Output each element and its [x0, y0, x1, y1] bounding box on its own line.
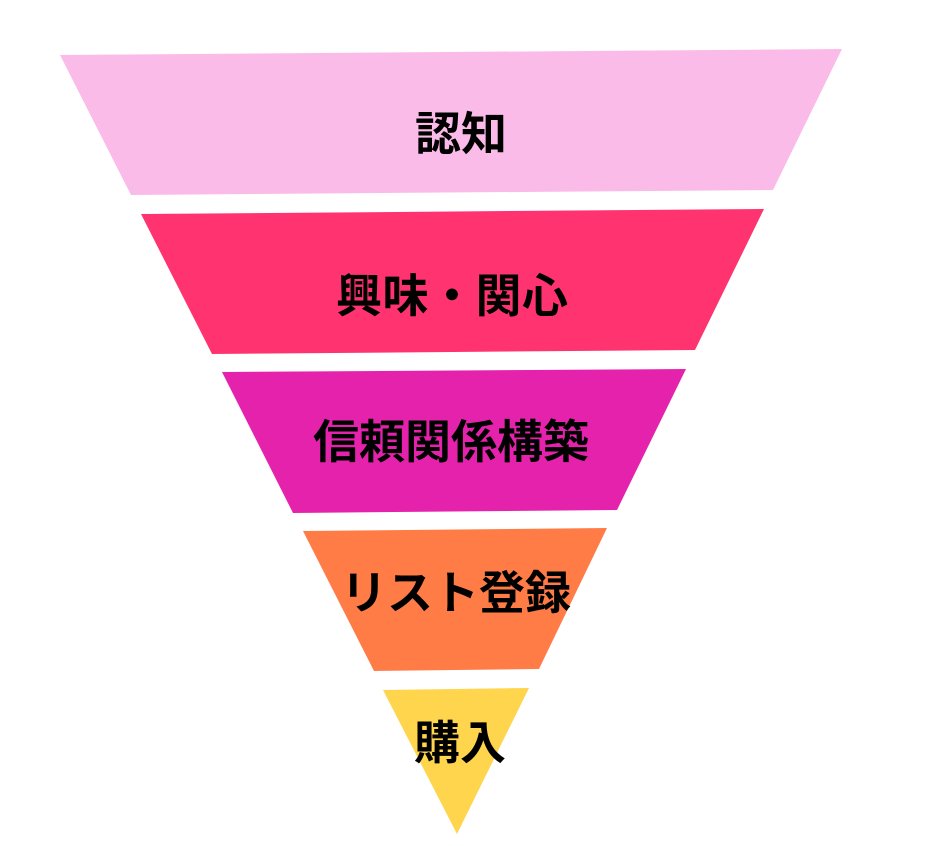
funnel tier 2: interest: 興味・関心: [336, 270, 568, 322]
funnel tier 3: trust building: [222, 369, 686, 513]
funnel tier 4: list registration: リスト登録: [341, 567, 571, 619]
funnel tier 4: list registration: [303, 528, 607, 671]
funnel tier 3: trust building: 信頼関係構築: [313, 416, 589, 468]
funnel tier 2: interest: [141, 209, 764, 354]
funnel tier 5: purchase: [383, 688, 529, 834]
funnel tier 5: purchase: 購入: [414, 717, 506, 769]
funnel tier 1: awareness: [60, 49, 842, 195]
funnel tier 1: awareness: 認知: [415, 108, 507, 160]
